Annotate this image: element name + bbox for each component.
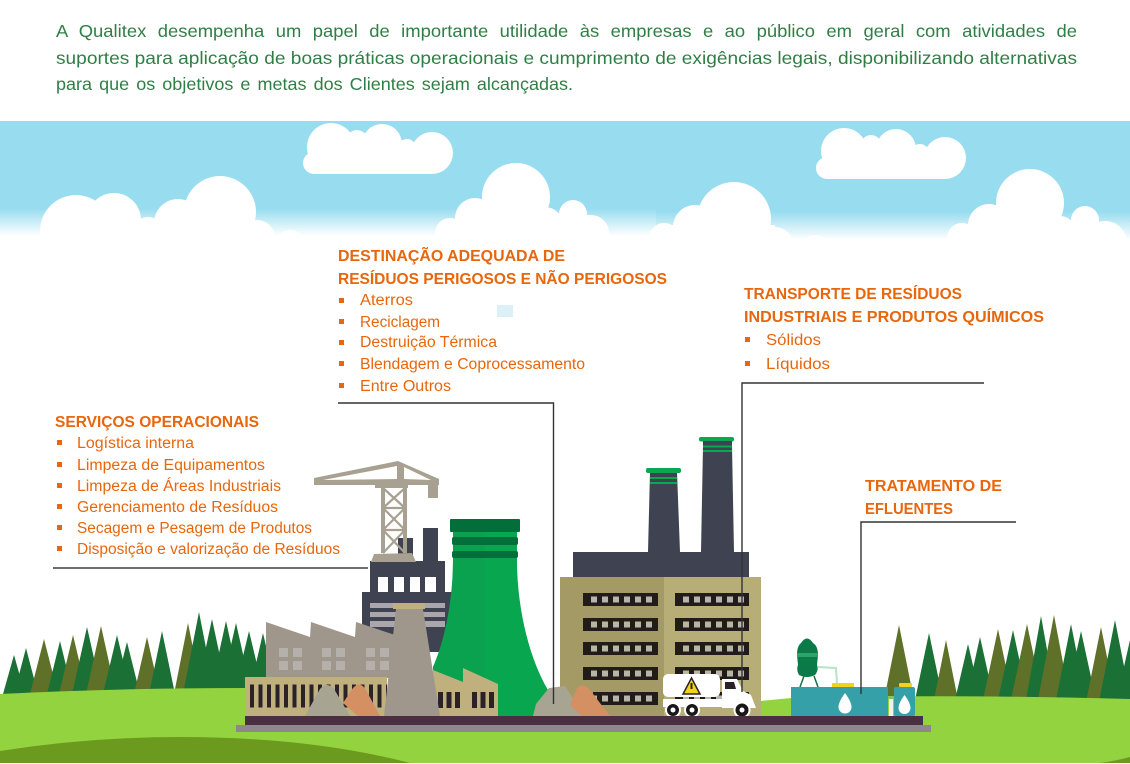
text block: tratamento de efluentes	[865, 478, 1002, 518]
text block: transporte: TRANSPORTE DE RESÍDUOS	[744, 284, 962, 303]
beige office building	[560, 437, 761, 716]
trees: left group	[3, 612, 277, 694]
text block: destinação adequada: DESTINAÇÃO ADEQUADA DE	[338, 245, 565, 265]
cloud: upper left	[303, 123, 453, 174]
gray chimney	[384, 603, 440, 716]
icon: hazard triangle	[683, 678, 700, 694]
text block: destinação adequada: Destruição Térmica	[360, 334, 497, 351]
text block: destinação adequada: RESÍDUOS PERIGOSOS E NÃO PERIGOSOS	[338, 268, 667, 288]
text block: serviços operacionais: Logística interna	[77, 435, 194, 452]
text block: serviços operacionais: Disposição e valorização de Resíduos	[77, 541, 340, 558]
leader line: efluentes	[861, 522, 1016, 694]
intro paragraph: A Qualitex desempenha um papel de importante utilidade às empresas e ao público em geral com atividades de	[56, 21, 1077, 41]
dark factory	[362, 528, 452, 652]
text block: serviços operacionais: Limpeza de Equipamentos	[77, 457, 265, 474]
text block: destinação adequada	[338, 245, 667, 395]
text block: destinação adequada: Reciclagem	[360, 314, 440, 331]
text block: destinação adequada: Blendagem e Coprocessamento	[360, 356, 585, 373]
text block: transporte: Líquidos	[766, 356, 830, 373]
material piles centre	[533, 685, 610, 716]
leader line: serviços operacionais	[53, 567, 368, 569]
text block: serviços operacionais	[55, 414, 340, 558]
cloud bank: centre	[435, 163, 830, 265]
tan low building right	[433, 668, 498, 716]
leader line: destinação	[338, 403, 554, 704]
intro paragraph	[56, 21, 1077, 94]
text block: tratamento de efluentes: EFLUENTES	[865, 501, 953, 518]
ground	[0, 688, 1130, 763]
icon: water drop small	[898, 695, 910, 714]
cloud bank: right	[947, 169, 1127, 265]
ground: dark hill right	[1100, 757, 1130, 763]
leader line: transporte	[742, 383, 984, 692]
gray sawtooth factory	[266, 622, 395, 678]
tanker truck	[663, 674, 756, 718]
intro paragraph: para que os objetivos e metas dos Clientes sejam alcançadas.	[56, 74, 573, 94]
text block: transporte	[744, 284, 1044, 373]
text block: transporte: Sólidos	[766, 332, 821, 349]
tan low building left	[245, 677, 387, 716]
effluent treatment tanks	[791, 638, 915, 716]
text block: transporte: INDUSTRIAIS E PRODUTOS QUÍMICOS	[744, 307, 1044, 326]
intro paragraph: suportes para aplicação de boas práticas operacionais e cumprimento de exigências legais, disponibilizando alternativas	[56, 48, 1077, 68]
text block: serviços operacionais: Limpeza de Áreas Industriais	[77, 478, 281, 495]
text block: serviços operacionais: Secagem e Pesagem de Produtos	[77, 520, 312, 537]
illustration: industrial complex	[236, 437, 931, 732]
pale artifact patch	[497, 305, 513, 317]
material piles left	[305, 684, 380, 716]
text block: serviços operacionais: SERVIÇOS OPERACIONAIS	[55, 414, 259, 431]
platform	[236, 716, 931, 732]
icon: water drop	[838, 693, 852, 714]
clouds	[0, 123, 1130, 267]
trees: right group	[884, 615, 1130, 702]
crane	[314, 461, 439, 562]
text block: destinação adequada: Aterros	[360, 292, 413, 309]
cloud bank: left	[40, 176, 305, 267]
sky background	[0, 121, 1130, 240]
text block: tratamento de efluentes: TRATAMENTO DE	[865, 478, 1002, 495]
ground: dark hill left	[0, 737, 410, 763]
text block: destinação adequada: Entre Outros	[360, 378, 451, 395]
text block: serviços operacionais: Gerenciamento de Resíduos	[77, 499, 278, 516]
green cooling tower	[433, 519, 548, 716]
cloud: upper right	[816, 128, 966, 179]
